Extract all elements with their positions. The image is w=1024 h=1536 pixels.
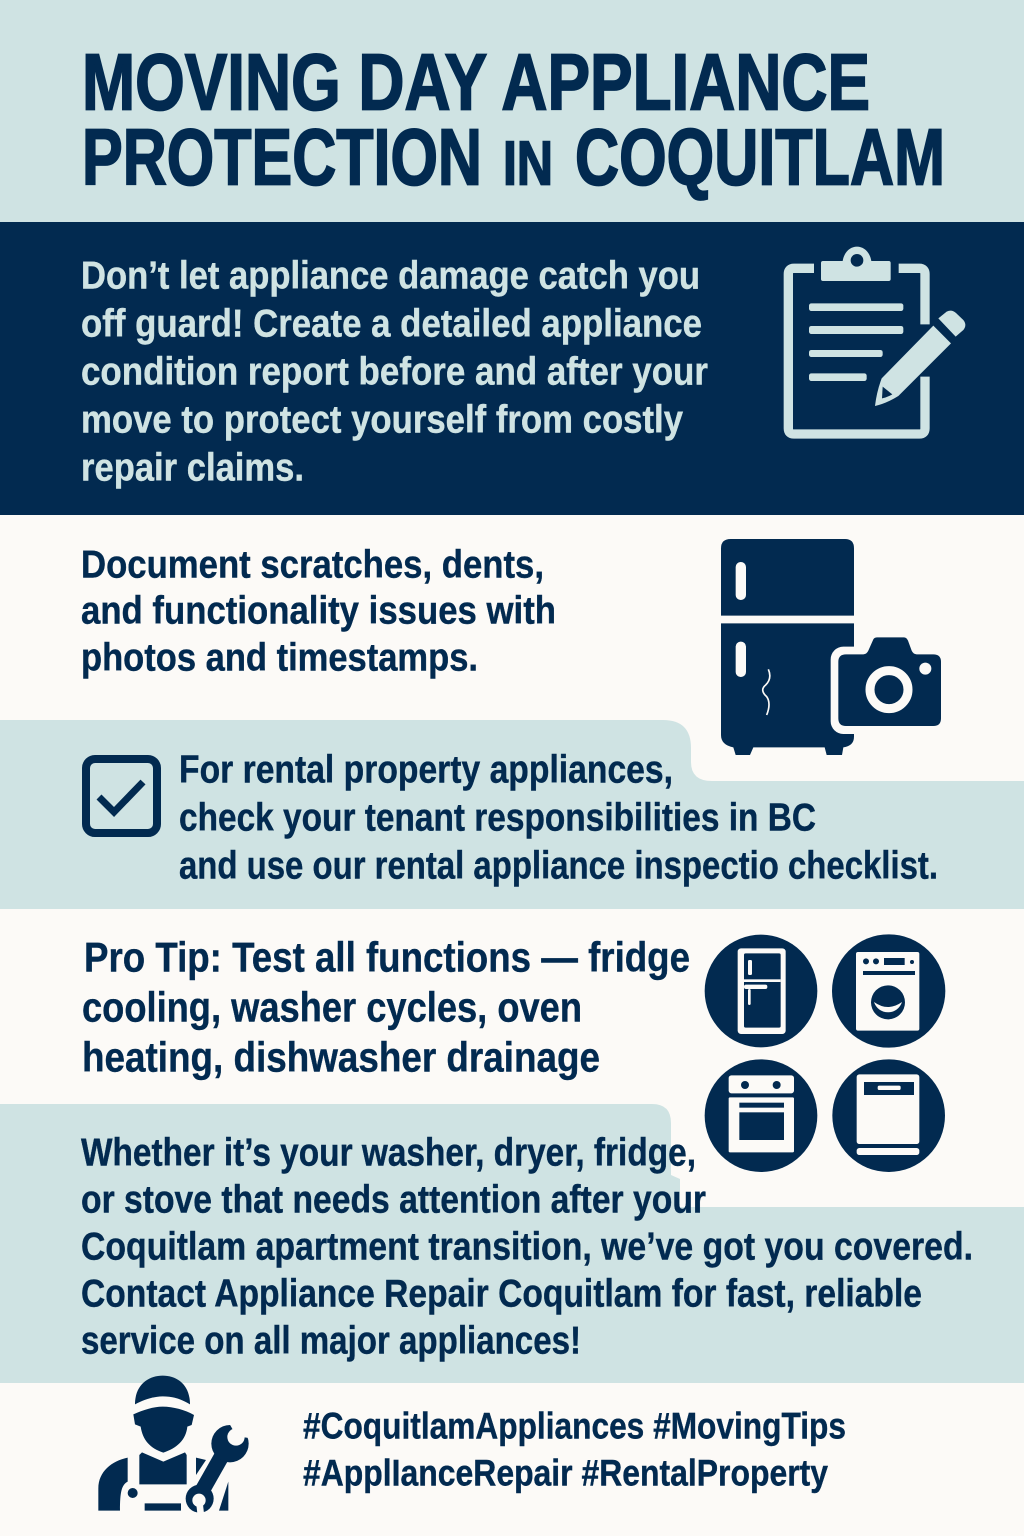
- icon: checkbox: [86, 759, 157, 833]
- panel: intro: [0, 222, 1024, 515]
- title: IN: [503, 130, 553, 198]
- rental text: For rental property appliances,: [179, 748, 673, 792]
- title: [82, 38, 945, 202]
- contact text: Whether it’s your washer, dryer, fridge,: [81, 1132, 696, 1174]
- panel: contact call to action: [0, 1104, 1024, 1383]
- hashtags: [303, 1406, 846, 1494]
- icon: repair technician with wrench: [98, 1376, 257, 1516]
- hashtags: #ApplIanceRepair #RentalProperty: [303, 1452, 828, 1494]
- icon: fridge and camera: [721, 539, 957, 755]
- document text: photos and timestamps.: [81, 636, 478, 680]
- document text: [81, 544, 556, 680]
- rental text: check your tenant responsibilities in BC: [179, 796, 816, 840]
- intro text: repair claims.: [81, 446, 304, 490]
- contact text: [81, 1132, 973, 1362]
- panel: document damage: [81, 544, 556, 680]
- panel: rental property: [0, 720, 1024, 909]
- pro tip text: [82, 934, 690, 1080]
- title: PROTECTION: [82, 112, 482, 202]
- icon: clipboard and pencil: [788, 247, 965, 434]
- icon: oven circle: [705, 1059, 817, 1172]
- icons: four appliance circles: [705, 934, 945, 1172]
- pro tip text: cooling, washer cycles, oven: [82, 984, 582, 1030]
- intro text: Don’t let appliance damage catch you: [81, 254, 700, 298]
- panel: pro tip: [82, 934, 690, 1080]
- icon: dishwasher circle: [832, 1059, 945, 1172]
- contact text: or stove that needs attention after your: [81, 1178, 706, 1222]
- rental text: [179, 748, 938, 888]
- icon: fridge circle: [705, 935, 817, 1047]
- panel: footer: [98, 1376, 846, 1516]
- intro text: [81, 254, 708, 490]
- intro text: condition report before and after your: [81, 350, 708, 394]
- intro text: off guard! Create a detailed appliance: [81, 302, 702, 346]
- panel: title header: [0, 0, 1024, 222]
- intro text: move to protect yourself from costly: [81, 398, 683, 442]
- pro tip text: heating, dishwasher drainage: [82, 1034, 600, 1080]
- pro tip text: Pro Tip: Test all functions — fridge: [84, 934, 690, 980]
- document text: and functionality issues with: [81, 590, 556, 632]
- hashtags: #CoquitlamAppliances #MovingTips: [303, 1406, 846, 1446]
- document text: Document scratches, dents,: [81, 544, 544, 586]
- icon: washer circle: [832, 934, 945, 1048]
- contact text: service on all major appliances!: [81, 1320, 581, 1362]
